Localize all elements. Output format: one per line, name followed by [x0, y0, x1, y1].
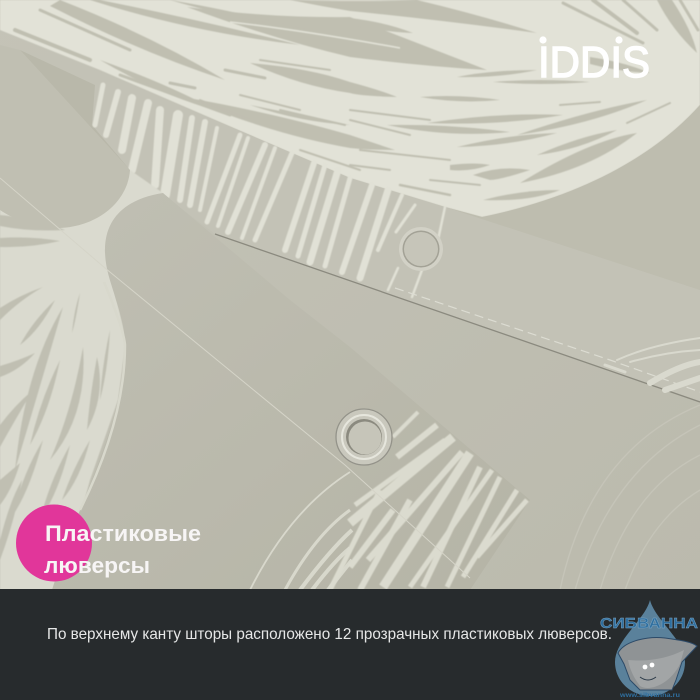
heading: люверсы [44, 553, 150, 578]
watermark: Sibvanna logo [600, 600, 698, 699]
icon: smiling bathtub [618, 638, 697, 690]
pattern: faint curves on lower right [560, 405, 700, 590]
pattern: hem corner [605, 338, 700, 390]
seam line [0, 178, 470, 578]
icon: lower grommet [336, 409, 392, 465]
heading: Пластиковые [45, 521, 201, 546]
panel: top patterned fabric [0, 0, 700, 217]
badge: pink circle [16, 504, 92, 582]
pattern: lower hem stripes [330, 412, 527, 590]
website: www.sibvanna.ru [619, 693, 680, 699]
panel: left patterned fabric [0, 170, 163, 590]
wordmark: СИБВАННА [600, 615, 698, 632]
hem dark edge [215, 234, 700, 402]
logo: iddis: IDDIS [538, 38, 650, 87]
icon: upper grommet [399, 227, 443, 271]
panel: plain right area under pattern [445, 105, 700, 290]
pattern: hem stripes [95, 85, 445, 297]
panel: dark footer [0, 589, 700, 700]
pattern: white outlines on plain fabric [80, 282, 352, 590]
panel: left fold blob [0, 45, 130, 228]
icon: water drop [615, 600, 685, 696]
panel: upper hem [20, 50, 700, 402]
text: footer description: По верхнему канту шторы расположено 12 прозрачных пластиковых люверсов. [47, 626, 612, 643]
hem stitching [395, 288, 700, 392]
panel: lower plain fabric [52, 193, 530, 590]
